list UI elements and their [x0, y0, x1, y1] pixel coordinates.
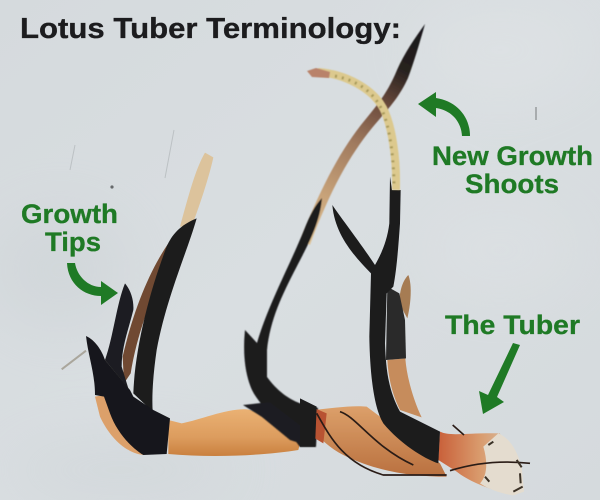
- dark leaf over tuber: [243, 402, 312, 447]
- title: Lotus Tuber Terminology:: [20, 13, 401, 45]
- orange end: [95, 395, 143, 455]
- label: Growth Tips: Tips: [45, 227, 101, 257]
- root twig: [62, 351, 86, 369]
- black blade: [133, 218, 197, 412]
- centre black stem: [244, 198, 322, 447]
- specks on cut end: [485, 442, 523, 492]
- black stem and leaf: [332, 177, 440, 463]
- photo: pale new shoot: [318, 72, 396, 190]
- photo: centre shoot and tuber: [243, 24, 425, 447]
- label: Growth Tips: Growth: [21, 199, 118, 229]
- white cut end: [480, 433, 524, 495]
- arrow: to the tuber: [479, 343, 520, 414]
- brown crossing shoot: [300, 24, 425, 245]
- beige shoot: [180, 153, 213, 227]
- middle tuber: [313, 406, 447, 477]
- second black tip: [105, 283, 133, 388]
- red joint: [315, 408, 327, 443]
- label: New Growth Shoots: Shoots: [465, 169, 559, 199]
- label: New Growth Shoots: [432, 141, 593, 199]
- tuber tip: [438, 432, 507, 492]
- arrow: to growth tips: [67, 263, 118, 305]
- arrow: to new growth shoots: [418, 92, 470, 136]
- label: New Growth Shoots: New Growth: [432, 141, 593, 171]
- grey stub: [386, 287, 406, 360]
- orange stalk: [387, 358, 422, 417]
- fine roots: [317, 412, 530, 475]
- photo: right tuber section with new growth shoot: [300, 177, 530, 495]
- black wrap: [86, 336, 170, 455]
- bud: [399, 275, 411, 318]
- photo: left tuber section with growth tips: [62, 153, 300, 456]
- label: Growth Tips: [21, 199, 118, 257]
- tuber body: [168, 409, 300, 456]
- centre knot: [300, 398, 317, 447]
- photo: shoot pink tip: [307, 68, 330, 78]
- brown sheath: [123, 243, 170, 383]
- label: The Tuber: The Tuber: [445, 310, 581, 340]
